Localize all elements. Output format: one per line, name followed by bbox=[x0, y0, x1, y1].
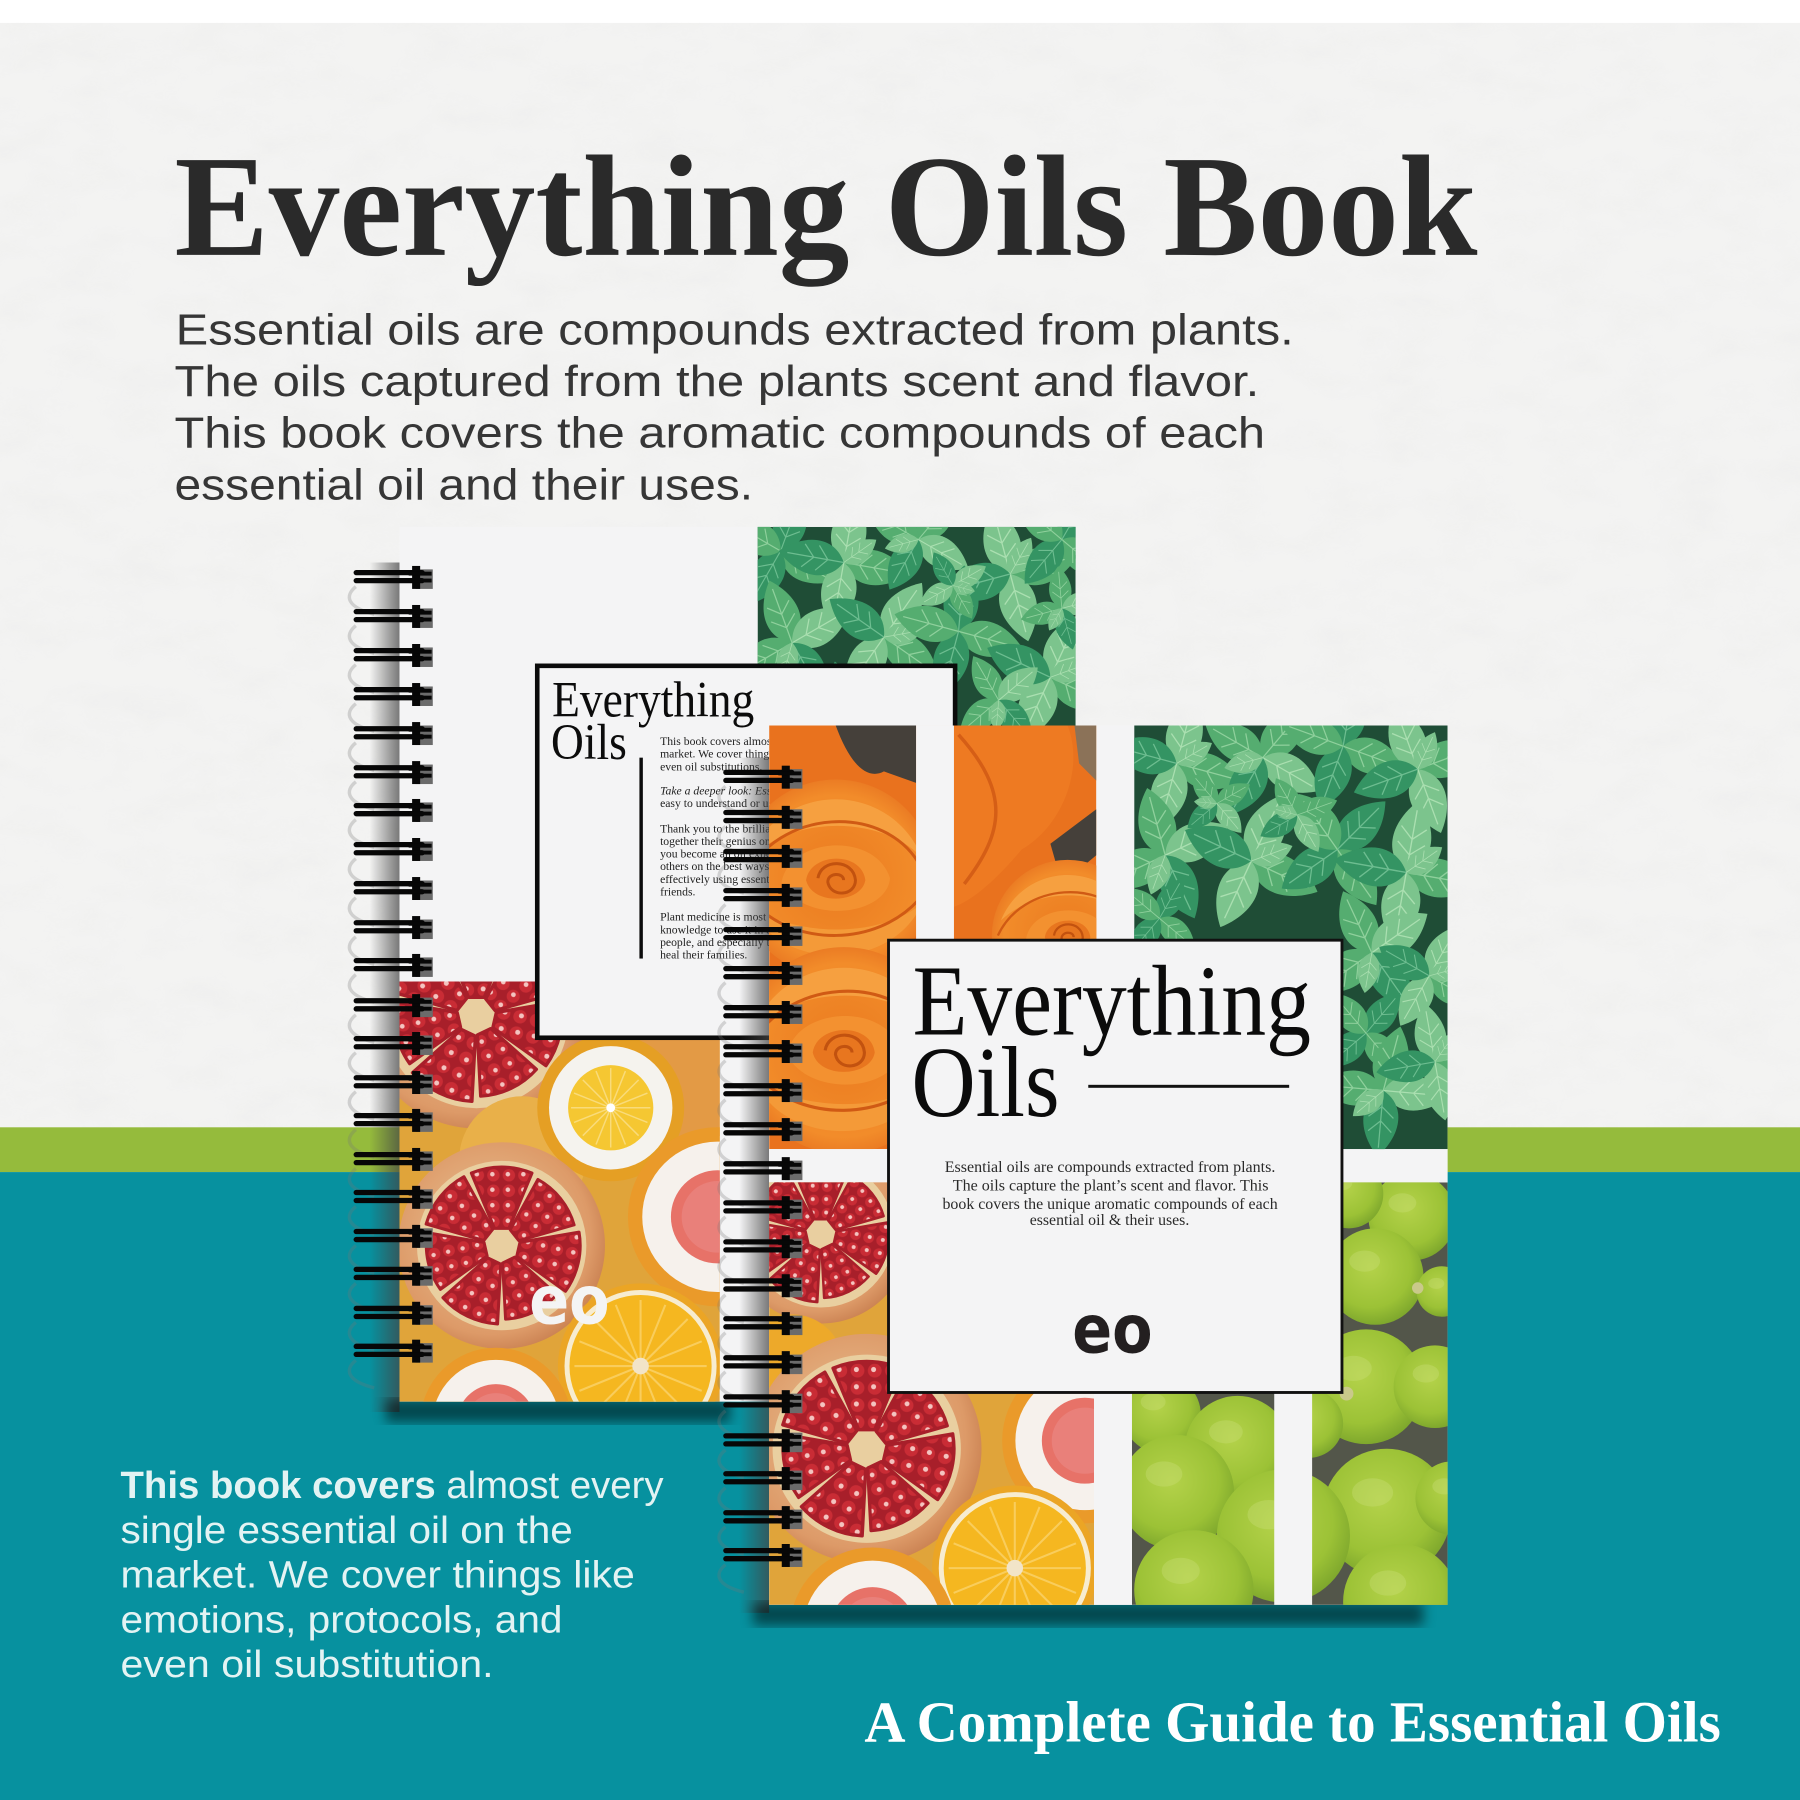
front card heading bbox=[911, 944, 1311, 1138]
rose photo bbox=[769, 726, 1096, 1150]
back card body text: Plant medicine is most powerful with the bbox=[660, 911, 852, 924]
lower left text block bbox=[121, 1465, 664, 1686]
back card body text: you become an oil expert and teach bbox=[660, 848, 826, 861]
front card heading: Oils bbox=[911, 1026, 1060, 1138]
front notebook cover bbox=[769, 726, 1448, 1605]
lower left text block: emotions, protocols, and bbox=[121, 1599, 562, 1641]
back card body text: even oil substitutions. bbox=[660, 760, 762, 773]
intro text block: This book covers the aromatic compounds of each bbox=[174, 410, 1265, 458]
fruit photo, front cover bbox=[769, 1182, 1094, 1605]
lower left text block: market. We cover things like bbox=[121, 1555, 635, 1597]
front notebook bbox=[717, 726, 1448, 1628]
eo logo, back cover: eo bbox=[529, 1262, 610, 1340]
front card description bbox=[942, 1159, 1278, 1229]
back card body text: Thank you to the brilliant minds that put bbox=[660, 822, 850, 835]
back notebook cover bbox=[399, 527, 1076, 1402]
front card description: book covers the unique aromatic compounds of each bbox=[942, 1196, 1278, 1213]
back card body text: together their genius on this. We hope bbox=[660, 835, 837, 848]
back card body text: This book covers almost every single bbox=[660, 735, 834, 748]
back card body text: effectively using essential oils with bbox=[660, 873, 825, 886]
intro text block bbox=[174, 306, 1294, 509]
back notebook bbox=[349, 457, 1143, 1499]
back card body text: others on the best ways of safely and bbox=[660, 860, 833, 873]
back card body text bbox=[660, 735, 852, 962]
back card body text: friends. bbox=[660, 885, 696, 898]
intro text block: Essential oils are compounds extracted from plants. bbox=[176, 306, 1294, 354]
front title card bbox=[889, 940, 1342, 1392]
back card body text: knowledge to use it in a way that helps bbox=[660, 923, 842, 936]
lower left text block: single essential oil on the bbox=[121, 1510, 573, 1552]
intro text block: essential oil and their uses. bbox=[174, 461, 753, 509]
back card heading: Oils bbox=[551, 714, 627, 770]
back card body text: Take a deeper look: Essential oils made bbox=[660, 784, 846, 797]
mint photo, back cover bbox=[758, 526, 1076, 726]
back spiral binding bbox=[349, 566, 433, 1388]
back card body text: market. We cover things like emotions bbox=[660, 748, 840, 761]
back card heading: Everything bbox=[552, 671, 754, 727]
front card description: The oils capture the plant’s scent and flavor. This bbox=[953, 1177, 1268, 1194]
back card body text: people, and especially those who want to bbox=[660, 936, 852, 949]
back inner title card bbox=[537, 666, 955, 1038]
lower left text block: even oil substitution. bbox=[121, 1644, 494, 1686]
front notebook shadow bbox=[739, 758, 1423, 1626]
back card body text: easy to understand or use. bbox=[660, 797, 781, 810]
lime photo bbox=[1132, 1182, 1448, 1605]
back card heading bbox=[551, 671, 754, 770]
front card description: Essential oils are compounds extracted from plants. bbox=[945, 1159, 1275, 1176]
back notebook shadow bbox=[370, 562, 730, 1422]
intro text block: The oils captured from the plants scent and flavor. bbox=[174, 358, 1259, 406]
mint photo, front cover bbox=[1134, 726, 1448, 1150]
fruit photo, back cover bbox=[400, 982, 720, 1402]
bottom tagline: A Complete Guide to Essential Oils bbox=[864, 1689, 1721, 1754]
back card body text: heal their families. bbox=[660, 949, 747, 962]
lower left text block: This book covers almost every bbox=[121, 1465, 664, 1507]
front card heading: Everything bbox=[913, 944, 1311, 1056]
white stripes, rose row bbox=[769, 726, 1448, 1182]
title: Everything Oils Book bbox=[174, 127, 1478, 287]
front card description: essential oil & their uses. bbox=[1030, 1212, 1189, 1229]
front spiral binding bbox=[719, 766, 802, 1592]
eo logo, front cover: eo bbox=[1072, 1290, 1153, 1368]
white stripes, lower row bbox=[1094, 1182, 1312, 1605]
